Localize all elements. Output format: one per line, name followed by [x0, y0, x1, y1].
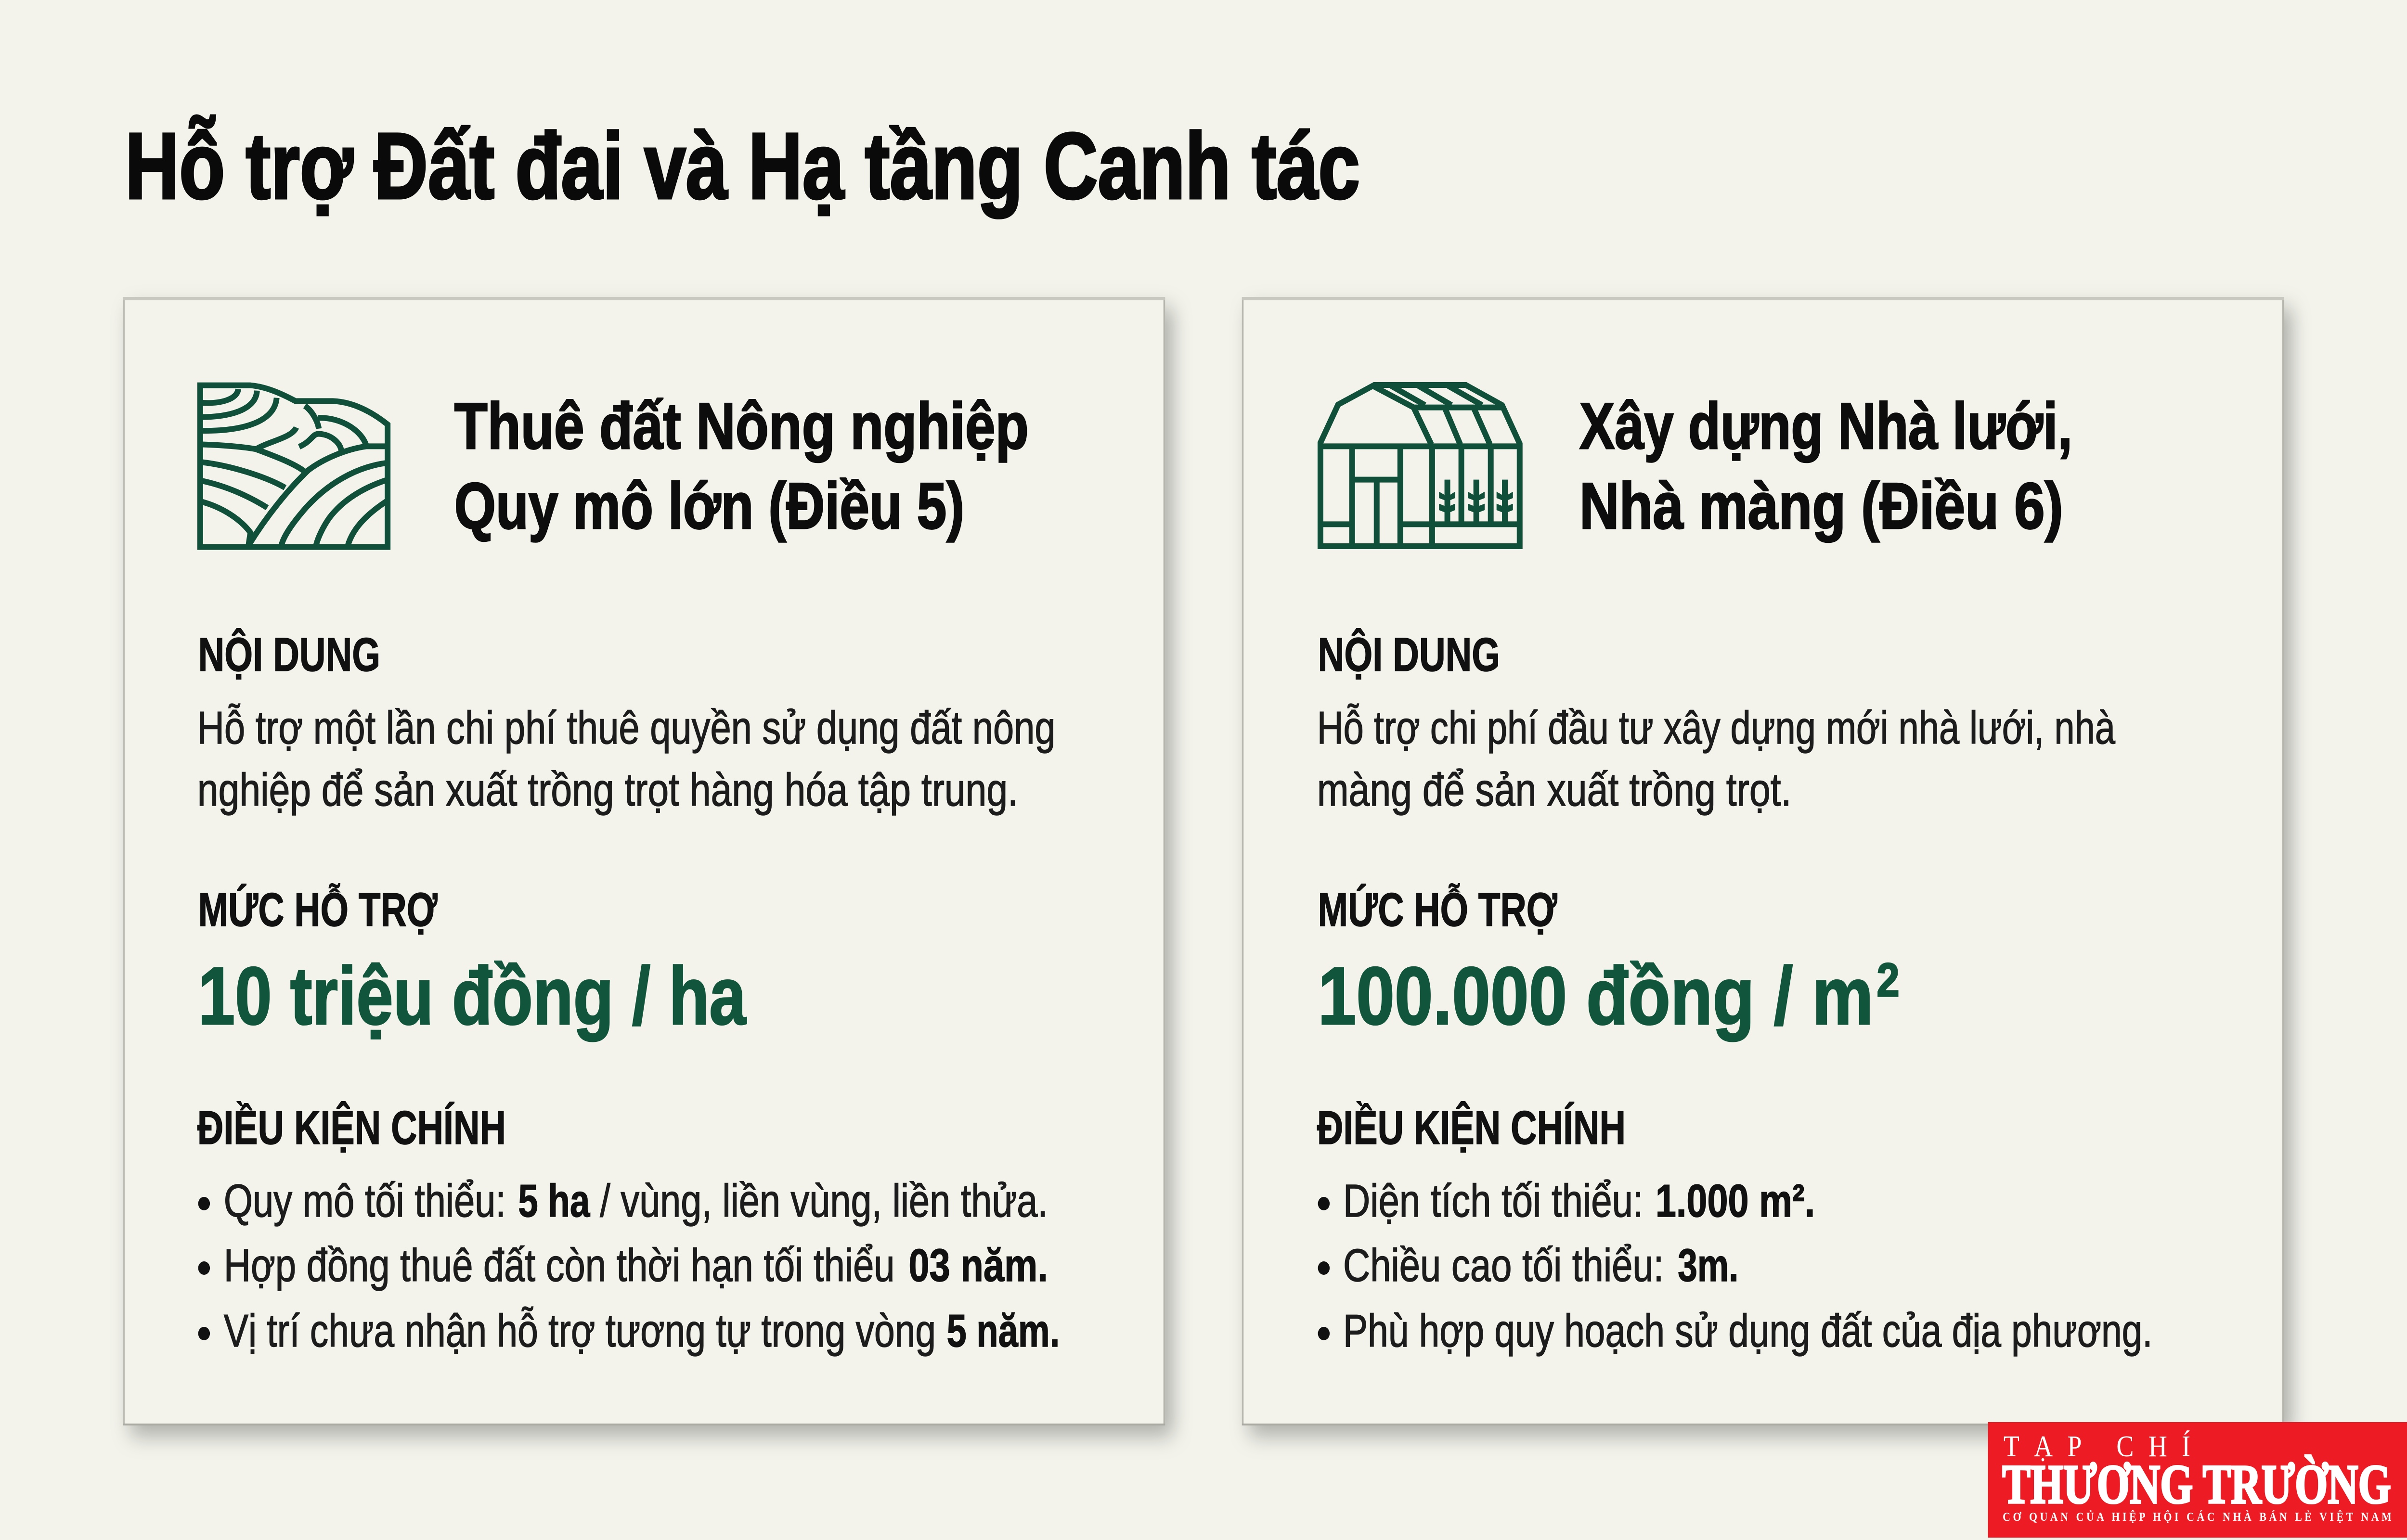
conditions list: Vị trí chưa nhận hỗ trợ tương tự trong vòng: [224, 1305, 936, 1357]
conditions list: Diện tích tối thiểu:: [1343, 1175, 1643, 1227]
conditions list: 5 năm.: [947, 1305, 1060, 1357]
section label: main conditions: ĐIỀU KIỆN CHÍNH: [197, 1102, 506, 1154]
card heading: Thuê đất Nông nghiệp: [454, 389, 1029, 463]
support value: 10 triệu đồng / ha: [198, 950, 747, 1041]
card heading: Nhà màng (Điều 6): [1579, 469, 2063, 543]
conditions list: 1.000 m².: [1656, 1175, 1815, 1227]
support value: 100.000 đồng / m: [1318, 950, 1874, 1041]
icon: greenhouse: [1320, 385, 1520, 546]
section label: support level: MỨC HỖ TRỢ: [1318, 884, 1557, 936]
conditions list: Hợp đồng thuê đất còn thời hạn tối thiểu: [224, 1240, 895, 1291]
card heading: Xây dựng Nhà lưới,: [1579, 389, 2072, 463]
conditions list: 5 ha: [518, 1175, 590, 1227]
support value: 2: [1876, 954, 1900, 1006]
logo: Tạp chí Thương Trường: [1988, 1422, 2407, 1538]
content text: Hỗ trợ chi phí đầu tư xây dựng mới nhà lưới, nhà: [1317, 702, 2116, 754]
logo: Tạp chí Thương Trường: CƠ QUAN CỦA HIỆP HỘI CÁC NHÀ BÁN LẺ VIỆT NAM: [2003, 1511, 2392, 1524]
content text: Hỗ trợ một lần chi phí thuê quyền sử dụng đất nông: [197, 702, 1056, 754]
section label: content: NỘI DUNG: [198, 629, 380, 681]
content text: [1317, 702, 2116, 816]
title: Hỗ trợ Đất đai và Hạ tầng Canh tác: [125, 113, 1360, 218]
section label: content: NỘI DUNG: [1318, 629, 1500, 681]
content text: [197, 702, 1056, 816]
section label: main conditions: ĐIỀU KIỆN CHÍNH: [1317, 1102, 1626, 1154]
section label: support level: MỨC HỖ TRỢ: [198, 884, 438, 936]
panel: net house and greenhouse construction: [1242, 297, 2284, 1425]
conditions list: [1318, 1175, 2152, 1357]
content text: màng để sản xuất trồng trọt.: [1317, 764, 1791, 816]
conditions list: 3m.: [1678, 1240, 1739, 1291]
panel: large-scale agricultural land lease: [123, 297, 1165, 1425]
logo: Tạp chí Thương Trường: TẠP CHÍ: [2004, 1430, 2190, 1463]
card heading: [1579, 389, 2072, 543]
card heading: [454, 389, 1029, 543]
conditions list: Quy mô tối thiểu:: [224, 1175, 506, 1227]
conditions list: Chiều cao tối thiểu:: [1343, 1240, 1664, 1291]
conditions list: 03 năm.: [908, 1240, 1048, 1291]
conditions list: / vùng, liền vùng, liền thửa.: [600, 1175, 1048, 1227]
conditions list: Phù hợp quy hoạch sử dụng đất của địa phương.: [1343, 1305, 2152, 1357]
icon: terraced fields: [200, 385, 388, 547]
conditions list: [198, 1175, 1060, 1357]
card heading: Quy mô lớn (Điều 5): [454, 469, 964, 543]
content text: nghiệp để sản xuất trồng trọt hàng hóa tập trung.: [197, 764, 1018, 816]
